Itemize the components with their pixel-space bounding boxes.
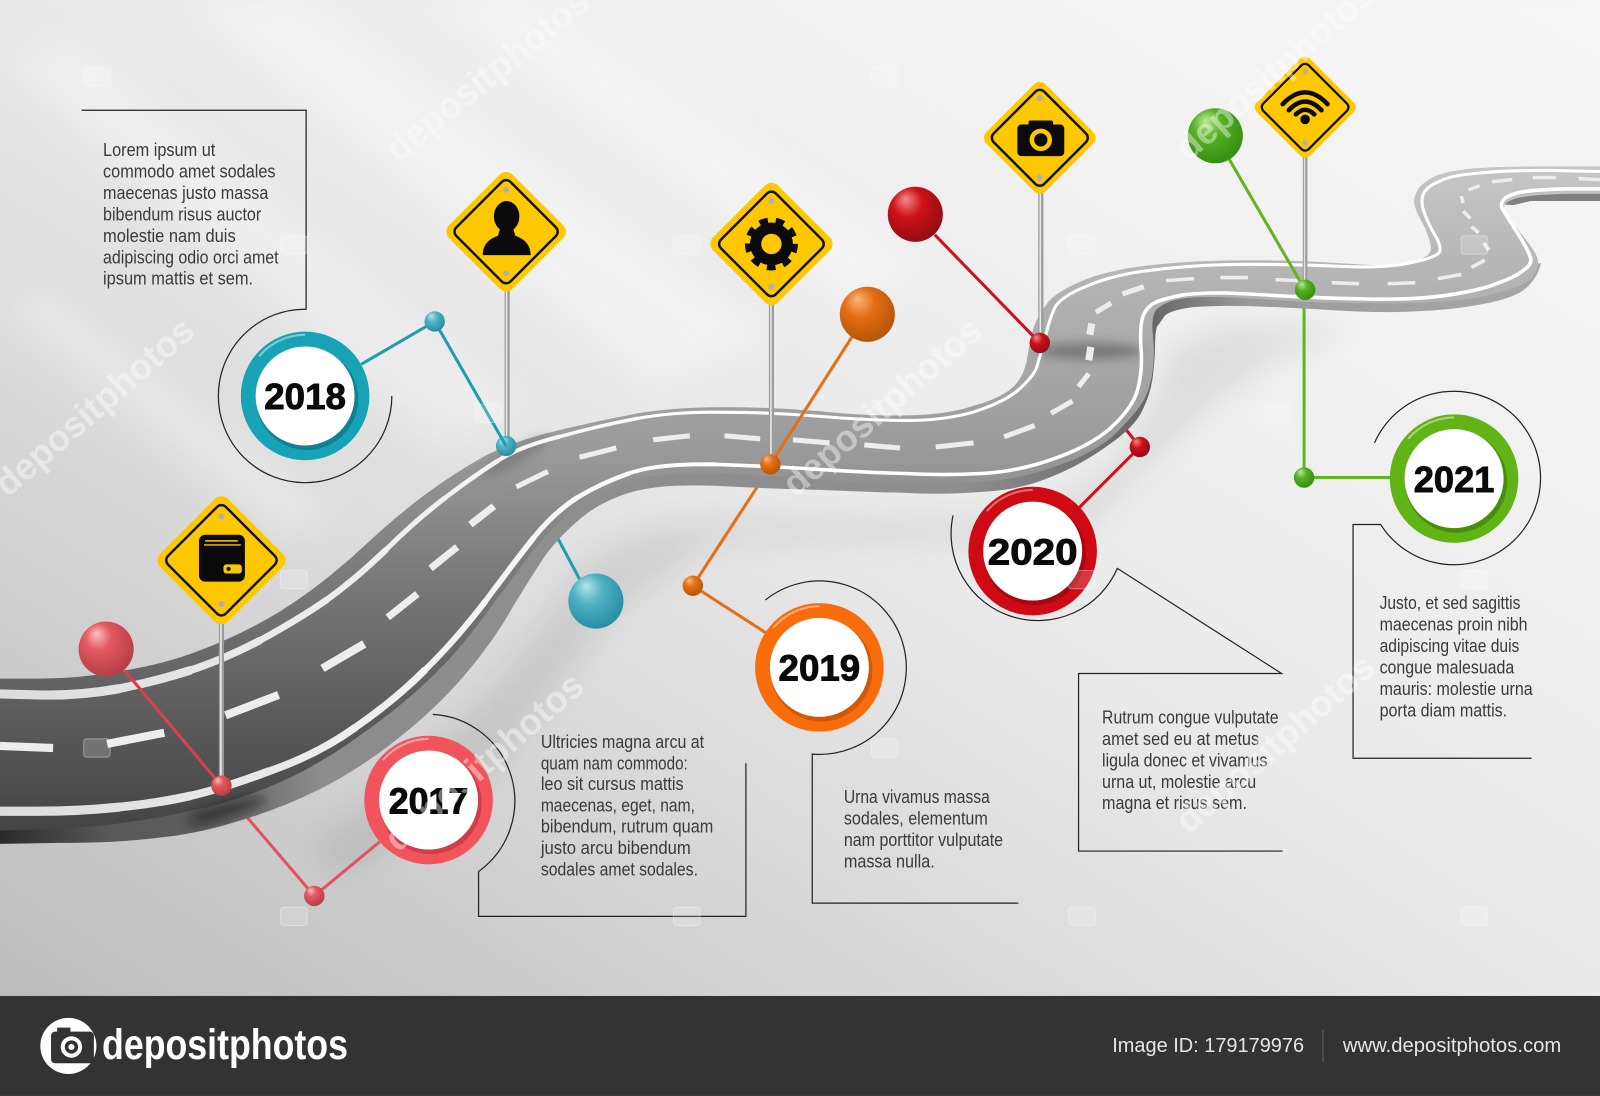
diamond plate	[706, 179, 836, 309]
pin line	[124, 670, 221, 786]
text block 2020	[1102, 707, 1279, 813]
road dot	[760, 454, 781, 475]
ring	[755, 603, 884, 732]
text block 2019	[844, 786, 1003, 871]
link line	[314, 842, 380, 896]
pin: 2020 red	[888, 187, 1050, 353]
link dot	[1294, 467, 1314, 488]
road dot	[1030, 333, 1050, 353]
text block 2021: Justo, et sed sagittis	[1380, 592, 1520, 613]
pin: 2021 green	[1188, 108, 1315, 300]
pin line	[770, 337, 852, 464]
sign post	[1302, 153, 1307, 291]
text block 2018: maecenas justo massa	[103, 182, 269, 203]
text block 2021	[1380, 592, 1533, 720]
panel: 2017 milestone outline and text	[433, 714, 746, 916]
text block 2018: molestie nam duis	[103, 225, 236, 246]
bolts	[768, 198, 774, 290]
connector: 2017 pin under road	[243, 812, 314, 896]
road dot	[211, 776, 232, 796]
year: 2019	[779, 649, 860, 689]
diamond plate	[981, 79, 1099, 197]
diamond plate	[443, 168, 570, 295]
inner shade	[984, 503, 1086, 605]
link line	[693, 586, 767, 634]
text block 2018: bibendum risus auctor	[103, 203, 261, 224]
road side wall	[0, 263, 1541, 844]
text block 2018	[103, 139, 279, 289]
text block 2020: ligula donec et vivamus	[1102, 749, 1267, 770]
icon: camera	[1017, 120, 1064, 156]
icon: person	[483, 201, 531, 255]
inner shade	[380, 752, 482, 854]
year: 2017	[389, 781, 468, 821]
road side wall, upper bend	[1500, 184, 1600, 205]
inner shade	[256, 348, 358, 450]
text block 2018: commodo amet sodales	[103, 161, 276, 182]
sphere	[840, 287, 895, 342]
stock photo camera watermarks	[84, 67, 1488, 926]
inner shade	[770, 619, 872, 721]
outline frame 2017	[433, 714, 746, 916]
outline frame 2021	[1353, 391, 1541, 758]
link line	[1078, 447, 1140, 509]
pin: 2018 teal	[496, 436, 623, 629]
ring highlight	[987, 490, 1033, 511]
ring highlight	[1408, 417, 1454, 439]
sign: wallet	[154, 492, 289, 786]
shadow band across road at bend	[1037, 343, 1143, 359]
text block 2020: magna et risus sem.	[1102, 792, 1247, 813]
connector: 2019 pin under road	[693, 478, 763, 586]
road surface	[0, 166, 1600, 831]
face	[983, 502, 1082, 601]
logo wordmark: depositphotos	[102, 1021, 348, 1069]
pin line	[935, 235, 1040, 343]
sign: camera	[981, 79, 1099, 343]
image id: Image ID: 179179976	[1112, 1035, 1304, 1057]
milestone badge 2020	[968, 437, 1150, 615]
milestone badge 2019	[683, 576, 884, 732]
text block 2018: adipiscing odio orci amet	[103, 246, 279, 267]
milestone badge 2018	[241, 311, 506, 460]
connector: 2020 pin under road	[1120, 422, 1140, 447]
face	[256, 346, 355, 445]
link dot	[1130, 437, 1150, 457]
text block 2021: porta diam mattis.	[1380, 699, 1507, 720]
diamond plate	[1252, 54, 1358, 161]
watermark text: depositphotos	[774, 309, 990, 504]
text block 2017: Ultricies magna arcu at	[541, 731, 705, 752]
bolts	[503, 187, 509, 277]
ring highlight	[383, 739, 429, 760]
road lower edge line	[0, 189, 1600, 811]
text block 2017: quam nam commodo:	[541, 752, 688, 773]
watermark text: depositphotos	[376, 664, 592, 859]
milestone badge 2017	[304, 736, 493, 906]
panel: 2021 milestone outline and text	[1353, 391, 1541, 758]
watermark text: depositphotos	[1167, 646, 1383, 841]
shadow across road at 2018 stop	[478, 431, 552, 482]
sign: wifi	[1252, 54, 1358, 291]
pin line	[1229, 158, 1305, 290]
connector: 2018 pin under road	[551, 526, 584, 587]
pin: 2019 orange	[760, 287, 895, 475]
link dot	[304, 886, 324, 906]
separator	[1322, 1030, 1324, 1062]
road dot	[1295, 280, 1315, 300]
icon: wifi	[1283, 92, 1328, 123]
link dot	[683, 576, 703, 596]
text block 2019: Urna vivamus massa	[844, 786, 990, 807]
ring	[1390, 414, 1518, 543]
sign post	[218, 618, 224, 786]
outline frame 2019	[765, 581, 1018, 903]
text block 2018: ipsum mattis et sem.	[103, 268, 253, 289]
face	[379, 751, 478, 850]
face	[770, 618, 869, 717]
banner background	[0, 996, 1600, 1096]
text block 2019: nam porttitor vulputate	[844, 829, 1003, 850]
year: 2020	[988, 532, 1078, 572]
panel: 2019 milestone outline and text	[765, 581, 1018, 903]
light rays	[0, 0, 918, 541]
outline frame 2020	[951, 515, 1283, 851]
text block 2021: congue malesuada	[1380, 657, 1515, 678]
outline frame 2018	[82, 110, 392, 483]
text block 2018: Lorem ipsum ut	[103, 139, 216, 160]
inner shade	[1405, 431, 1507, 533]
sign: gear	[706, 179, 836, 464]
text block 2020: urna ut, molestie arcu	[1102, 771, 1256, 792]
ring highlight	[259, 335, 305, 356]
icon: gear	[749, 221, 794, 266]
road	[0, 166, 1600, 844]
text block 2017: justo arcu bibendum	[540, 837, 691, 858]
text block 2021: mauris: molestie urna	[1380, 678, 1533, 699]
ring	[241, 332, 369, 460]
diamond plate	[154, 492, 289, 628]
link dot	[424, 311, 445, 332]
text block 2021: maecenas proin nibh	[1380, 614, 1528, 635]
road dot	[496, 436, 516, 456]
year: 2018	[264, 377, 346, 417]
text block 2017: sodales amet sodales.	[541, 859, 698, 880]
sign post	[504, 286, 510, 446]
bolts	[218, 513, 224, 607]
road centre dashes	[0, 178, 1600, 748]
sphere	[568, 574, 623, 629]
road drop shadow	[306, 327, 1357, 878]
ring	[364, 736, 493, 864]
text block 2020: Rutrum congue vulputate	[1102, 707, 1279, 728]
sphere	[888, 187, 943, 242]
website: www.depositphotos.com	[1342, 1035, 1561, 1057]
sign: person	[443, 168, 570, 446]
text block 2017: maecenas, eget, nam,	[541, 794, 695, 815]
panel: 2018 milestone outline and text	[82, 110, 392, 483]
text block 2021: adipiscing vitae duis	[1380, 635, 1519, 656]
text block 2019: massa nulla.	[844, 850, 935, 871]
text block 2020: amet sed eu at metus	[1102, 728, 1259, 749]
panel: 2020 milestone outline and text	[951, 515, 1283, 851]
text block 2017: bibendum, rutrum quam	[541, 816, 713, 837]
text block 2019: sodales, elementum	[844, 808, 988, 829]
link lines	[1304, 308, 1392, 478]
ring	[968, 487, 1097, 615]
shadow on wall at 2017 stop	[185, 792, 268, 828]
footer banner	[0, 996, 1600, 1096]
sign post	[768, 298, 774, 464]
road upper edge line	[0, 170, 1600, 695]
sphere	[79, 621, 134, 677]
watermark text	[0, 0, 1383, 859]
text block 2017	[540, 731, 713, 880]
sign post	[1038, 188, 1043, 343]
text block 2017: leo sit cursus mattis	[541, 773, 684, 794]
icon: wallet	[199, 535, 245, 582]
year: 2021	[1414, 460, 1494, 500]
milestone badge 2021	[1294, 308, 1518, 543]
bolts	[1302, 69, 1308, 146]
link lines	[361, 321, 506, 446]
sphere	[1188, 108, 1243, 163]
bolts	[1037, 95, 1043, 181]
pin: 2017 coral	[79, 621, 232, 796]
logo icon	[40, 1018, 96, 1074]
ring highlight	[773, 606, 819, 628]
face	[1405, 429, 1504, 528]
